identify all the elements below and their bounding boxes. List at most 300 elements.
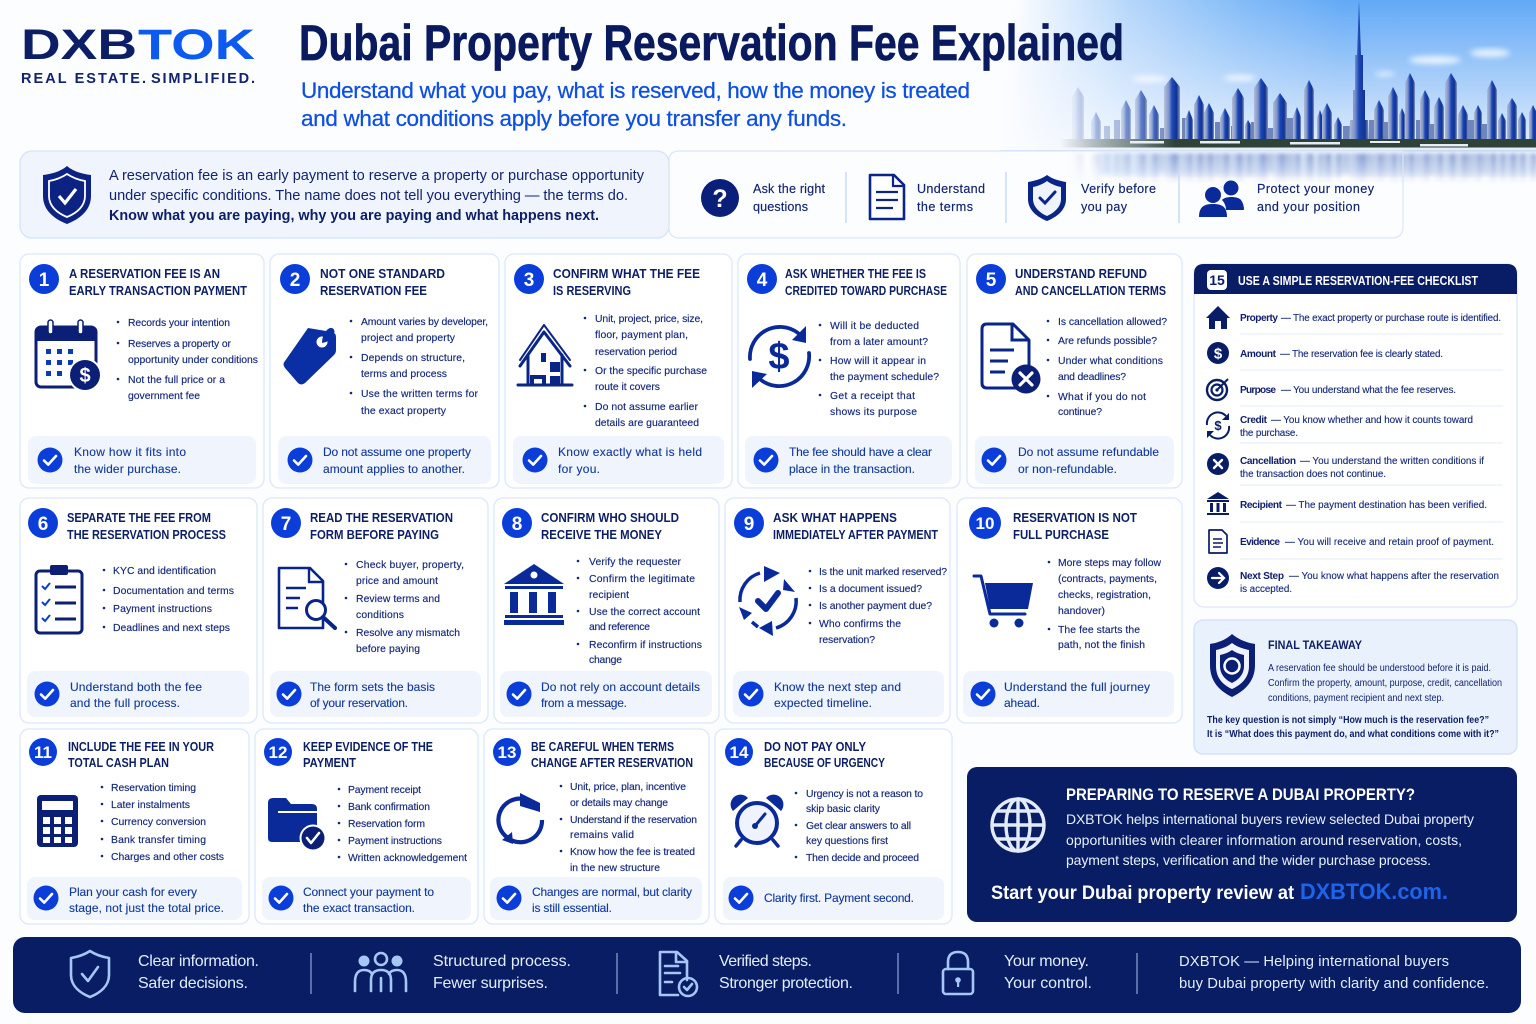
bullets: change — [589, 655, 622, 666]
callout: ahead. — [1004, 696, 1040, 710]
icon: house — [518, 325, 572, 386]
card 7 — [263, 498, 488, 723]
row: next step: is accepted. — [1240, 584, 1292, 595]
bullets: shows its purpose — [830, 407, 917, 418]
icon: question: ? — [712, 185, 728, 213]
bullets: Review terms and — [356, 594, 440, 605]
heading: DO NOT PAY ONLY — [764, 740, 867, 754]
card 13 — [484, 729, 709, 924]
heading: READ THE RESERVATION — [310, 511, 453, 525]
icon: calendar with dollar: $ — [79, 365, 91, 387]
bullets: Get clear answers to all — [806, 821, 911, 832]
subtitle: Understand what you pay, what is reserved, how the money is treated — [301, 78, 970, 103]
number 13 — [493, 738, 521, 766]
text: clear information — [138, 953, 259, 992]
icon: shopping cart — [974, 576, 1033, 628]
icon: document — [870, 175, 904, 219]
takeaway heading: FINAL TAKEAWAY — [1268, 638, 1362, 652]
card 2 — [270, 254, 499, 488]
icon: question — [701, 179, 739, 217]
bullets — [560, 782, 697, 874]
row: credit: $ — [1214, 418, 1222, 433]
bullets: Is a document issued? — [819, 584, 922, 595]
callout: The fee should have a clear — [789, 445, 932, 459]
text: verify — [1081, 182, 1156, 214]
bullets: opportunity under conditions — [128, 355, 258, 366]
heading — [1013, 511, 1137, 542]
number 8: 8 — [512, 514, 522, 535]
logo: REAL ESTATE. — [21, 71, 146, 87]
cta heading: PREPARING TO RESERVE A DUBAI PROPERTY? — [1066, 785, 1415, 804]
bullets: Amount varies by developer, — [361, 317, 488, 328]
number 6 — [28, 508, 58, 538]
row: recipient — [1207, 492, 1487, 515]
number 14 — [725, 738, 753, 766]
heading: FULL PURCHASE — [1013, 528, 1109, 542]
text: structured process: Structured process. — [433, 953, 571, 970]
logo: SIMPLIFIED. — [151, 71, 255, 87]
row: purpose — [1207, 379, 1456, 400]
heading: UNDERSTAND REFUND — [1015, 267, 1147, 281]
bullets — [1048, 558, 1161, 651]
bullets: Who confirms the — [819, 619, 901, 630]
bullets: Charges and other costs — [111, 852, 224, 863]
bullets: Is another payment due? — [819, 601, 932, 612]
number 4 — [747, 264, 777, 294]
text: protect — [1257, 182, 1375, 214]
icon: dollar cycle — [750, 326, 809, 388]
card 14 — [715, 729, 952, 924]
heading — [67, 511, 226, 542]
row: evidence: Evidence — [1240, 537, 1280, 548]
text: clear information: Safer decisions. — [138, 975, 248, 992]
bullets: Confirm the legitimate — [589, 574, 695, 585]
bullets: route it covers — [595, 382, 660, 393]
bullets: Resolve any mismatch — [356, 628, 460, 639]
subtitle — [301, 78, 970, 131]
card 3 — [505, 254, 732, 488]
bullets: Bank transfer timing — [111, 835, 206, 846]
callout: Do not rely on account details — [541, 680, 700, 694]
callout: The form sets the basis — [310, 680, 435, 694]
bullets: Then decide and proceed — [806, 853, 919, 864]
row: next step — [1207, 567, 1499, 595]
bullets: government fee — [128, 391, 200, 402]
card 1 — [20, 254, 264, 488]
callout — [270, 671, 481, 717]
text: understand terms — [917, 182, 985, 214]
icon: clipboard checklist — [36, 565, 82, 633]
bullets: Is cancellation allowed? — [1058, 317, 1167, 328]
bullets: Reconfirm if instructions — [589, 640, 702, 651]
bullets: Payment receipt — [348, 785, 421, 796]
callout: Connect your payment to — [303, 885, 434, 899]
heading: BE CAREFUL WHEN TERMS — [531, 740, 674, 754]
row: recipient: Recipient — [1240, 500, 1283, 511]
callout: for you. — [558, 462, 600, 476]
text: your money — [1004, 953, 1092, 992]
cta line — [991, 879, 1448, 904]
bullets: Are refunds possible? — [1058, 336, 1157, 347]
logo: DXB — [21, 21, 137, 69]
heading: IS RESERVING — [553, 284, 631, 298]
bullets: How will it appear in — [830, 356, 926, 367]
bullets: The fee starts the — [1058, 625, 1140, 636]
row: credit: — You know whether and how it counts toward — [1271, 415, 1473, 426]
text: brand line: buy Dubai property with clarity and confidence. — [1179, 976, 1489, 992]
heading — [773, 511, 938, 542]
row: property — [1206, 306, 1501, 329]
number 4: 4 — [757, 270, 768, 291]
heading: NOT ONE STANDARD — [320, 267, 445, 281]
bullets — [809, 567, 947, 646]
number 3: 3 — [524, 270, 534, 291]
intro panel — [20, 151, 669, 238]
row: recipient: — The payment destination has been verified. — [1286, 500, 1487, 511]
bullets — [584, 314, 707, 429]
heading — [764, 740, 886, 770]
cta body: DXBTOK helps international buyers review selected Dubai property — [1066, 811, 1474, 827]
row: credit: the purchase. — [1240, 428, 1298, 439]
heading: CONFIRM WHAT THE FEE — [553, 267, 700, 281]
bullets: Records your intention — [128, 318, 230, 329]
title: Dubai Property Reservation Fee Explained — [299, 15, 1124, 71]
heading — [68, 740, 214, 770]
heading: PAYMENT — [303, 756, 356, 770]
number 1: 1 — [39, 270, 50, 291]
card 4 — [738, 254, 960, 488]
heading: ASK WHAT HAPPENS — [773, 511, 897, 525]
callout: Know how it fits into — [74, 445, 186, 459]
bullets: skip basic clarity — [806, 804, 881, 815]
bullets: floor, payment plan, — [595, 330, 688, 341]
bullets: Use the correct account — [589, 607, 700, 618]
bullets: reservation? — [819, 635, 875, 646]
callout: from a message. — [541, 696, 627, 710]
text: verify: Verify before — [1081, 182, 1156, 196]
bullets — [103, 566, 234, 634]
row: cancellation: — You understand the written conditions if — [1300, 456, 1484, 467]
text: ask questions: questions — [753, 200, 808, 214]
callout — [278, 436, 491, 484]
card 10 — [957, 498, 1182, 723]
number 12: 12 — [269, 743, 287, 762]
callout: Do not assume refundable — [1018, 445, 1159, 459]
icon: check cycle — [739, 566, 796, 636]
row: amount: Amount — [1240, 349, 1277, 360]
callout — [490, 877, 702, 920]
callout: is still essential. — [532, 901, 612, 915]
bullets — [1047, 317, 1167, 418]
callout: place in the transaction. — [789, 462, 915, 476]
number 11 — [29, 738, 57, 766]
text: protect: Protect your money — [1257, 182, 1375, 196]
callout — [745, 436, 952, 484]
cta body: opportunities with clearer information around reservation, costs, — [1066, 832, 1462, 848]
heading: FORM BEFORE PAYING — [310, 528, 439, 542]
callout: amount applies to another. — [323, 462, 465, 476]
bullets: Understand if the reservation — [570, 815, 697, 826]
bullets: More steps may follow — [1058, 558, 1161, 569]
bullets: Under what conditions — [1058, 356, 1163, 367]
bullets: Unit, price, plan, incentive — [570, 782, 686, 793]
heading: CREDITED TOWARD PURCHASE — [785, 284, 947, 298]
number 6: 6 — [38, 514, 48, 535]
heading — [320, 267, 445, 298]
row: credit — [1207, 412, 1473, 439]
bullets: from a later amount? — [830, 337, 928, 348]
bullets: Or the specific purchase — [595, 366, 707, 377]
row: cancellation — [1207, 453, 1484, 480]
text: verified steps: Stronger protection. — [719, 975, 853, 992]
number 11: 11 — [34, 743, 52, 762]
bullets: key questions first — [806, 836, 888, 847]
callout — [975, 436, 1174, 484]
intro text — [109, 168, 645, 224]
row: property: Property — [1240, 313, 1278, 324]
number 14: 14 — [730, 743, 749, 762]
text: your money: Your control. — [1004, 975, 1092, 992]
panel: key actions — [669, 151, 1403, 238]
text: your money: Your money. — [1004, 953, 1089, 970]
takeaway body: conditions, payment recipient and next step. — [1268, 693, 1444, 704]
takeaway body — [1268, 663, 1502, 704]
callout: expected timeline. — [774, 696, 872, 710]
callout: Plan your cash for every — [69, 885, 197, 899]
icon: shield check — [43, 166, 91, 224]
heading: IMMEDIATELY AFTER PAYMENT — [773, 528, 938, 542]
bullets: price and amount — [356, 576, 438, 587]
icon: document with magnifier — [279, 568, 335, 628]
logo — [21, 21, 255, 87]
heading — [69, 267, 247, 298]
bullets: Get a receipt that — [830, 391, 915, 402]
number 2: 2 — [290, 270, 300, 291]
callout — [262, 877, 471, 920]
row: amount — [1207, 342, 1443, 364]
intro text: Know what you are paying, why you are paying and what happens next. — [109, 208, 599, 224]
bullets: continue? — [1058, 407, 1102, 418]
text: brand line: DXBTOK — Helping international buyers — [1179, 954, 1449, 970]
callout — [500, 671, 712, 717]
row: next step: — You know what happens after the reservation — [1289, 571, 1499, 582]
bullets: Reservation form — [348, 819, 425, 830]
callout — [28, 436, 256, 484]
bullets — [819, 321, 939, 418]
bullets — [101, 783, 224, 863]
number 3 — [514, 264, 544, 294]
text: verify: you pay — [1081, 200, 1128, 214]
heading — [310, 511, 453, 542]
key question — [1207, 715, 1499, 740]
bullets: Is the unit marked reserved? — [819, 567, 947, 578]
icon: document with cross — [982, 324, 1040, 394]
cta line: Start your Dubai property review at — [991, 883, 1295, 904]
heading: ASK WHETHER THE FEE IS — [785, 267, 926, 281]
bullets: Payment instructions — [348, 836, 442, 847]
icon: shield — [71, 951, 109, 997]
card 5 — [967, 254, 1182, 488]
bullets: What if you do not — [1058, 392, 1146, 403]
callout: Understand both the fee — [70, 680, 202, 694]
heading: A RESERVATION FEE IS AN — [69, 267, 220, 281]
heading — [531, 740, 693, 770]
takeaway body: A reservation fee should be understood before it is paid. — [1268, 663, 1491, 674]
bullets: Written acknowledgement — [348, 853, 467, 864]
bullets — [577, 557, 702, 666]
callout: of your reservation. — [310, 696, 408, 710]
icon: price tag — [284, 328, 336, 384]
cta line: DXBTOK.com. — [1300, 879, 1448, 904]
icon: alarm clock — [731, 795, 783, 846]
bullets: Will it be deducted — [830, 321, 919, 332]
cta body — [1066, 811, 1474, 868]
callout: Know exactly what is held — [558, 445, 702, 459]
bullets — [338, 785, 467, 864]
heading — [303, 740, 433, 770]
callout: Do not assume one property — [323, 445, 471, 459]
bullets: handover) — [1058, 606, 1105, 617]
checklist header: USE A SIMPLE RESERVATION-FEE CHECKLIST — [1238, 274, 1478, 288]
icon: shield — [1210, 634, 1255, 697]
subtitle: and what conditions apply before you transfer any funds. — [301, 106, 847, 131]
heading: KEEP EVIDENCE OF THE — [303, 740, 433, 754]
heading — [1015, 267, 1166, 298]
bullets — [345, 560, 464, 655]
row: credit: Credit — [1240, 415, 1268, 426]
bullets — [350, 317, 488, 417]
bullets: Verify the requester — [589, 557, 682, 568]
bullets: Reserves a property or — [128, 339, 232, 350]
card 12 — [255, 729, 478, 924]
callout: Clarity first. Payment second. — [764, 891, 914, 905]
heading: CONFIRM WHO SHOULD — [541, 511, 679, 525]
callout: or non-refundable. — [1018, 462, 1117, 476]
callout: and the full process. — [70, 696, 180, 710]
text: structured process — [433, 953, 571, 992]
row: cancellation: the transaction does not continue. — [1240, 469, 1386, 480]
checklist header: 15 — [1209, 272, 1225, 288]
number 5: 5 — [986, 270, 997, 291]
bullets: Do not assume earlier — [595, 402, 699, 413]
bullets: (contracts, payments, — [1058, 574, 1157, 585]
row: purpose: — You understand what the fee reserves. — [1281, 385, 1456, 396]
icon: calculator — [37, 795, 78, 847]
bullets — [795, 789, 923, 864]
number 10: 10 — [976, 514, 994, 533]
icon: people — [355, 953, 406, 991]
callout — [723, 877, 944, 920]
bullets: remains valid — [570, 830, 634, 841]
bullets: terms and process — [361, 369, 447, 380]
bullets: Reservation timing — [111, 783, 196, 794]
heading: INCLUDE THE FEE IN YOUR — [68, 740, 214, 754]
number 7: 7 — [281, 514, 291, 535]
icon: document check — [660, 952, 697, 996]
takeaway body: Confirm the property, amount, purpose, credit, cancellation — [1268, 678, 1502, 689]
card 11 — [20, 729, 249, 924]
bullets: Bank confirmation — [348, 802, 430, 813]
bullets: Documentation and terms — [113, 586, 234, 597]
icon: folder with check — [268, 798, 326, 852]
bullets: Check buyer, property, — [356, 560, 464, 571]
bullets: Urgency is not a reason to — [806, 789, 923, 800]
bullets: path, not the finish — [1058, 640, 1145, 651]
header skyline photo — [1000, 0, 1536, 182]
row: evidence: — You will receive and retain proof of payment. — [1285, 537, 1494, 548]
heading: AND CANCELLATION TERMS — [1015, 284, 1166, 298]
bullets: Deadlines and next steps — [113, 623, 230, 634]
bullets: or details may change — [570, 798, 668, 809]
card 9 — [725, 498, 950, 723]
row: cancellation: Cancellation — [1240, 456, 1296, 467]
text: protect: and your position — [1257, 200, 1360, 214]
callout: stage, not just the total price. — [69, 901, 224, 915]
heading: BECAUSE OF URGENCY — [764, 756, 886, 770]
bullets: Not the full price or a — [128, 375, 225, 386]
bullets: reservation period — [595, 347, 677, 358]
callout — [27, 877, 242, 920]
bullets: project and property — [361, 333, 456, 344]
bullets: KYC and identification — [113, 566, 216, 577]
bullets: recipient — [589, 590, 629, 601]
heading: CHANGE AFTER RESERVATION — [531, 756, 693, 770]
bullets: Unit, project, price, size, — [595, 314, 703, 325]
panel: call to action — [967, 767, 1517, 922]
text: brand line — [1179, 954, 1489, 992]
number 9 — [734, 508, 764, 538]
bullets — [117, 318, 258, 402]
bullets: in the new structure — [570, 863, 660, 874]
heading: RESERVATION IS NOT — [1013, 511, 1137, 525]
number 10 — [969, 507, 1001, 539]
logo: TOK — [138, 21, 255, 69]
card 8 — [494, 498, 719, 723]
icon: dollar cycle: $ — [768, 336, 790, 378]
callout: Changes are normal, but clarity — [532, 885, 692, 899]
heading: THE RESERVATION PROCESS — [67, 528, 226, 542]
bullets: and reference — [589, 622, 650, 633]
text: ask questions — [753, 182, 826, 214]
bullets: before paying — [356, 644, 420, 655]
bullets: Use the written terms for — [361, 389, 479, 400]
number 7 — [271, 508, 301, 538]
bullets: Later instalments — [111, 800, 190, 811]
heading: SEPARATE THE FEE FROM — [67, 511, 211, 525]
number 13: 13 — [498, 743, 516, 762]
row: amount: $ — [1214, 346, 1223, 362]
callout — [27, 671, 249, 717]
bullets: the exact property — [361, 406, 447, 417]
panel: checklist — [1194, 264, 1517, 607]
text: understand terms: the terms — [917, 200, 973, 214]
heading — [541, 511, 679, 542]
text: verified steps: Verified steps. — [719, 953, 812, 970]
text: clear information: Clear information. — [138, 953, 259, 970]
text: understand terms: Understand — [917, 182, 985, 196]
icon: calendar with dollar — [36, 320, 102, 392]
callout: Know the next step and — [774, 680, 901, 694]
number 8 — [502, 508, 532, 538]
bullets: details are guaranteed — [595, 418, 699, 429]
callout — [963, 671, 1174, 717]
key question: The key question is not simply “How much is the reservation fee?” — [1207, 715, 1489, 726]
heading: EARLY TRANSACTION PAYMENT — [69, 284, 247, 298]
heading — [785, 267, 947, 298]
icon: shield — [1028, 175, 1066, 221]
heading: TOTAL CASH PLAN — [68, 756, 169, 770]
number 12 — [264, 738, 292, 766]
